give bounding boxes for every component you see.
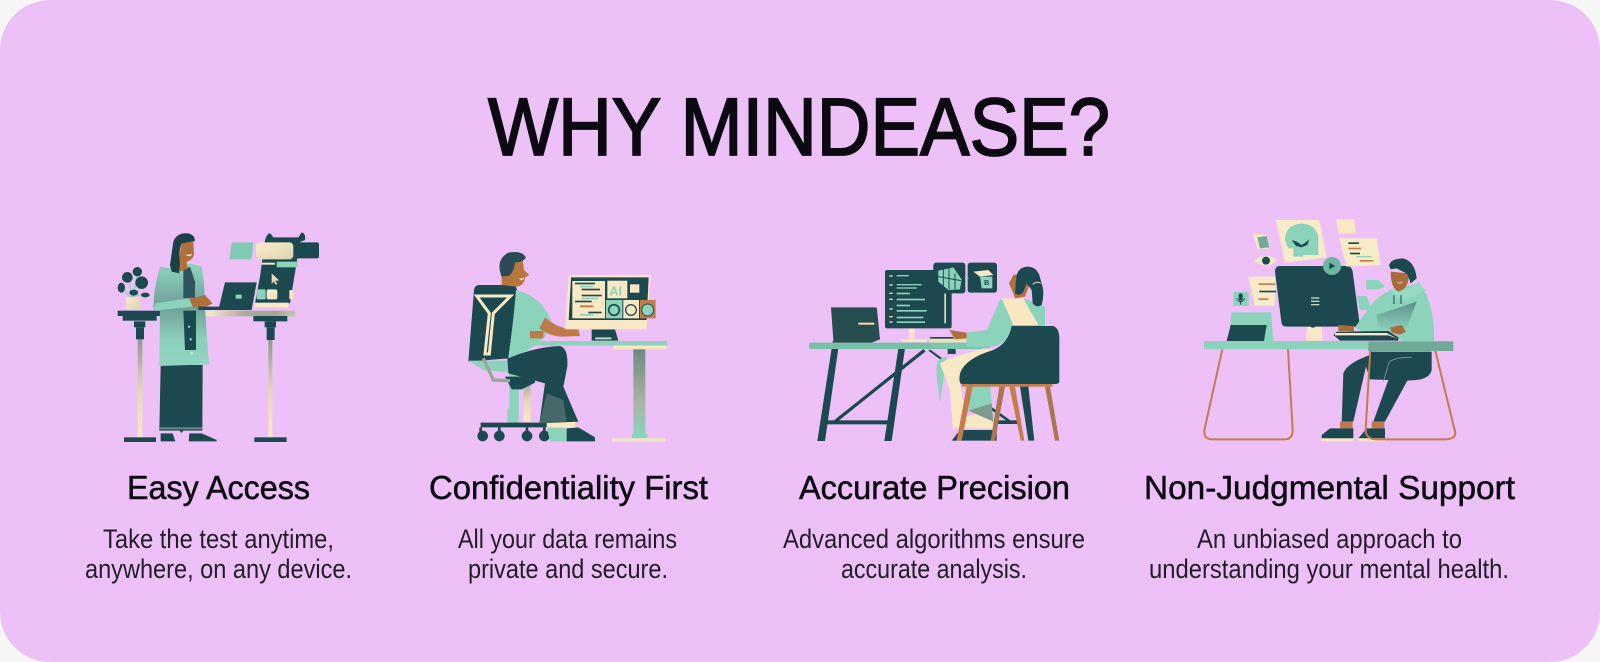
monitor with dashboard: AI: [609, 284, 622, 298]
woman on chair: [930, 267, 1059, 441]
desk top: [1204, 341, 1453, 351]
panel: accurate precision: [783, 263, 1085, 584]
panel: confidentiality first: [429, 252, 708, 584]
floating panels: B: [984, 278, 989, 287]
heading: Accurate Precision: Accurate Precision: [799, 469, 1070, 506]
description: Confidentiality First: All your data remains: [458, 524, 677, 554]
description: Non-Judgmental Support: understanding your mental health.: [1149, 554, 1509, 584]
floating panels: [933, 263, 997, 293]
illustration: man in hoodie at desk: [1204, 219, 1455, 441]
laptop: [831, 307, 880, 343]
man torso: [1333, 258, 1434, 341]
panel: non-judgmental support: [1144, 219, 1515, 584]
woman: [153, 233, 217, 441]
description: Confidentiality First: private and secure.: [468, 554, 668, 584]
description: Easy Access: anywhere, on any device.: [85, 554, 352, 584]
description: Confidentiality First: [458, 524, 677, 584]
chair legs: [1366, 349, 1455, 439]
icon: plant: [118, 267, 150, 310]
title: WHY MINDEASE?: [488, 82, 1110, 173]
heading: Easy Access: Easy Access: [127, 469, 310, 506]
desk legs: [1204, 349, 1293, 439]
laptop: [198, 282, 257, 310]
monitor with dashboard: [565, 275, 656, 341]
heading: Non-Judgmental Support: Non-Judgmental Support: [1144, 469, 1515, 506]
desk: [817, 348, 1018, 441]
heading: Confidentiality First: Confidentiality First: [429, 469, 708, 506]
description: Non-Judgmental Support: [1149, 524, 1509, 584]
description: Easy Access: [85, 524, 352, 584]
illustration: woman coding at desk: [809, 263, 1059, 441]
floating icons: [1233, 219, 1385, 310]
monitor: [1275, 266, 1359, 341]
desk: [532, 341, 667, 442]
illustration: woman at standing desk: [118, 232, 319, 442]
description: Accurate Precision: accurate analysis.: [841, 554, 1027, 584]
description: Accurate Precision: [783, 524, 1085, 584]
panel: easy access: [85, 232, 352, 584]
illustration: man at desk on office chair: [468, 252, 667, 442]
floating screens: [229, 232, 319, 307]
desk top: [809, 343, 982, 349]
office chair: [468, 285, 550, 441]
standing desk: [118, 311, 296, 442]
man: [499, 252, 595, 441]
man legs: [1322, 352, 1432, 441]
monitor with code: [885, 270, 952, 342]
description: Easy Access: Take the test anytime,: [103, 524, 334, 554]
description: Non-Judgmental Support: An unbiased approach to: [1197, 524, 1462, 554]
description: Accurate Precision: Advanced algorithms ensure: [783, 524, 1085, 554]
tablet: [1227, 312, 1273, 341]
